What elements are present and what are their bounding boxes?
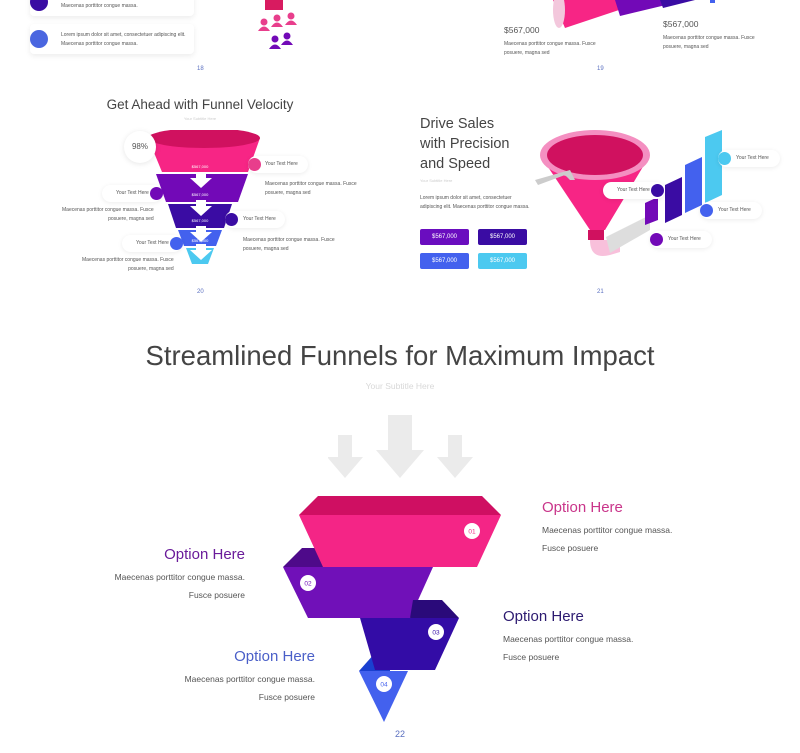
funnel graphic: $567,000 xyxy=(192,164,209,169)
card 2 text: Maecenas porttitor congue massa. xyxy=(61,41,138,47)
text block: option 3 xyxy=(503,608,633,662)
text block: option 1: Option Here xyxy=(542,499,623,516)
value buttons xyxy=(420,229,527,269)
text block: option 3: Option Here xyxy=(503,608,584,625)
desc 1 xyxy=(504,41,596,56)
page number 20: 20 xyxy=(197,289,204,295)
text block: option 4 xyxy=(185,648,315,702)
tier 3: 03 xyxy=(432,630,440,636)
subtitle: Your Subtitle Here xyxy=(420,178,452,183)
label right 3 xyxy=(225,211,285,228)
tier 2 xyxy=(283,548,433,618)
text block: option 1: Maecenas porttitor congue massa. xyxy=(542,525,672,535)
text block: option 2 xyxy=(115,546,245,600)
paragraph: Lorem ipsum dolor sit amet, consectetuer xyxy=(420,195,512,201)
desc right 3: Maecenas porttitor congue massa. Fusce xyxy=(243,237,335,243)
callout: 98% xyxy=(124,131,156,163)
heading: and Speed xyxy=(420,156,490,172)
text block: option 1: Fusce posuere xyxy=(542,543,598,553)
funnel graphic: $567,000 xyxy=(192,192,209,197)
title: Streamlined Funnels for Maximum Impact xyxy=(146,340,654,371)
card 2 xyxy=(30,24,194,54)
icon: bulb xyxy=(30,0,48,11)
value buttons: $567,000 xyxy=(432,234,457,240)
card 2 text xyxy=(61,32,186,47)
label right 1: Your Text Here xyxy=(265,161,298,167)
label: your text here 1: Your Text Here xyxy=(617,187,650,193)
paragraph xyxy=(420,195,530,210)
desc left 4 xyxy=(82,257,174,272)
paragraph: adipiscing elit. Maecenas porttitor congue massa. xyxy=(420,204,530,210)
funnel chart: four tiers xyxy=(283,496,501,722)
funnel graphic xyxy=(150,130,260,264)
text block: option 4: Maecenas porttitor congue massa. xyxy=(185,674,315,684)
card 1 xyxy=(30,0,194,16)
desc right 1 xyxy=(265,181,357,196)
text block: option 2: Fusce posuere xyxy=(189,590,245,600)
page number 21: 21 xyxy=(597,289,604,295)
value buttons: $567,000 xyxy=(490,234,515,240)
label: your text here 2 xyxy=(718,150,780,167)
tier 1: 01 xyxy=(468,528,476,536)
label: your text here 2: Your Text Here xyxy=(736,155,769,161)
heading: Drive Sales xyxy=(420,116,494,132)
page number 19: 19 xyxy=(597,66,604,72)
label: your text here 4 xyxy=(650,231,712,248)
funnel graphic: $567,000 xyxy=(192,218,209,223)
value 1: $567,000 xyxy=(504,25,539,35)
text block: option 1 xyxy=(542,499,672,553)
subtitle: Your Subtitle Here xyxy=(184,116,216,121)
desc left 2: Maecenas porttitor congue massa. Fusce xyxy=(62,207,154,213)
label: your text here 3: Your Text Here xyxy=(718,207,751,213)
heading: Get Ahead with Funnel Velocity xyxy=(107,97,293,112)
label: your text here 1 xyxy=(603,182,665,199)
tier 3 xyxy=(360,600,459,670)
heading xyxy=(420,116,509,172)
label left 4: Your Text Here xyxy=(136,240,169,246)
value buttons: $567,000 xyxy=(432,258,457,264)
funnel and bars graphic xyxy=(535,130,722,256)
desc 1: posuere, magna sed xyxy=(504,50,550,56)
label right 1 xyxy=(248,156,308,173)
text block: option 2: Maecenas porttitor congue massa. xyxy=(115,572,245,582)
desc left 4: posuere, magna sed xyxy=(128,266,174,272)
heading: with Precision xyxy=(420,136,509,152)
text block: option 3: Fusce posuere xyxy=(503,652,559,662)
label right 3: Your Text Here xyxy=(243,216,276,222)
panel: slide 19 fragment xyxy=(504,0,755,72)
value buttons: $567,000 xyxy=(490,258,515,264)
text block: option 3: Maecenas porttitor congue massa. xyxy=(503,634,633,644)
text block: option 4: Option Here xyxy=(234,648,315,665)
text block: option 4: Fusce posuere xyxy=(259,692,315,702)
icon: three down arrows xyxy=(328,415,473,478)
desc 2: Maecenas porttitor congue massa. Fusce xyxy=(663,35,755,41)
desc right 3: posuere, magna sed xyxy=(243,246,289,252)
desc 2 xyxy=(663,35,755,50)
label: your text here 3 xyxy=(700,202,762,219)
tier 4 xyxy=(359,653,408,722)
subtitle: Your Subtitle Here xyxy=(366,381,434,391)
value 2: $567,000 xyxy=(663,19,698,29)
label left 2 xyxy=(102,185,162,202)
desc 2: posuere, magna sed xyxy=(663,44,709,50)
desc left 2: posuere, magna sed xyxy=(108,216,154,222)
tier 2: 02 xyxy=(304,580,312,588)
label left 4 xyxy=(122,235,182,252)
funnel graphic: $567,000 xyxy=(192,238,209,243)
label: your text here 4: Your Text Here xyxy=(668,236,701,242)
cones graphic xyxy=(553,0,715,28)
text block: option 2: Option Here xyxy=(164,546,245,563)
card 2 text: Lorem ipsum dolor sit amet, consectetuer adipiscing elit. xyxy=(61,32,186,38)
desc left 2 xyxy=(62,207,154,222)
panel: slide 20 funnel velocity xyxy=(62,97,357,295)
label left 2: Your Text Here xyxy=(116,190,149,196)
panel: slide 18 fragment xyxy=(30,0,297,72)
people icons xyxy=(258,0,297,49)
desc 1: Maecenas porttitor congue massa. Fusce xyxy=(504,41,596,47)
icon: calendar xyxy=(30,30,48,48)
desc right 1: posuere, magna sed xyxy=(265,190,311,196)
desc right 1: Maecenas porttitor congue massa. Fusce xyxy=(265,181,357,187)
page number 18: 18 xyxy=(197,66,204,72)
callout: 98%: 98% xyxy=(132,142,148,151)
tier 4: 04 xyxy=(380,682,388,688)
desc right 3 xyxy=(243,237,335,252)
panel: slide 21 drive sales xyxy=(420,116,780,295)
card 1 text: Maecenas porttitor congue massa. xyxy=(61,3,138,9)
tier 1 xyxy=(299,496,501,567)
page number 22: 22 xyxy=(395,729,405,739)
desc left 4: Maecenas porttitor congue massa. Fusce xyxy=(82,257,174,263)
